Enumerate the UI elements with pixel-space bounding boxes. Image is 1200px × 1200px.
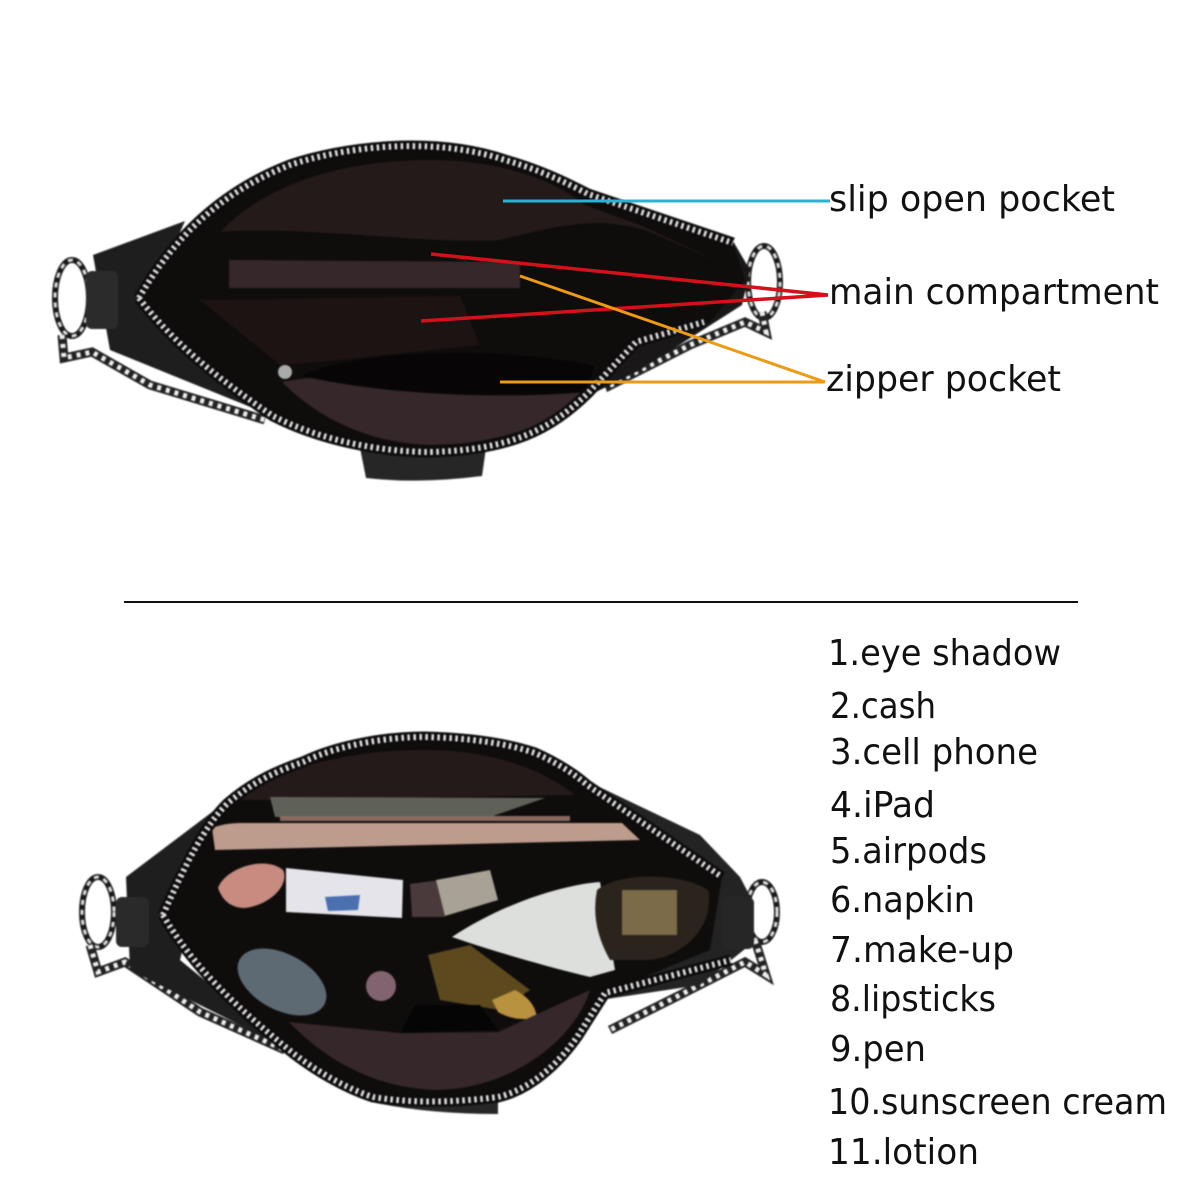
top bag left tab [86, 271, 118, 329]
top bag left ring and chain [55, 260, 265, 420]
item: perfume glass cap [595, 876, 709, 960]
list item 4: 4.iPad [830, 785, 935, 826]
bottom bag back lining [235, 750, 575, 800]
bottom bag zipper edge [163, 737, 731, 1102]
divider [124, 601, 1078, 603]
list item 7: 7.make-up [830, 930, 1014, 971]
item: cash/napkin pack [286, 868, 403, 918]
list item 10: 10.sunscreen cream [828, 1082, 1167, 1123]
top bag body [139, 146, 745, 452]
item: lipstick [366, 971, 396, 1001]
lines: main compartment [421, 254, 828, 321]
napkin logo [325, 895, 360, 911]
list item 1: 1.eye shadow [828, 633, 1061, 674]
list item 2: 2.cash [830, 686, 936, 727]
item list [828, 633, 1167, 1173]
label lines [421, 201, 830, 382]
label: slip open pocket: slip open pocket [829, 179, 1115, 220]
list item 3: 3.cell phone [830, 732, 1038, 773]
bottom bag left ring and chain [82, 877, 285, 1050]
list item 9: 9.pen [830, 1029, 926, 1070]
item: compact round make-up [226, 935, 338, 1029]
top bag outer leather [93, 221, 270, 415]
bottom bag floor lining [289, 990, 590, 1090]
item: napkin grey pouch [270, 797, 545, 817]
line: slip open pocket [503, 200, 830, 202]
item: sunscreen white bottle [452, 882, 615, 977]
top bag zipper pocket opening [302, 353, 595, 395]
line: zipper pocket [500, 276, 825, 382]
bottom bag outer leather [126, 800, 290, 1050]
list item 8: 8.lipsticks [830, 979, 996, 1020]
list item 5: 5.airpods [830, 831, 987, 872]
top bag right ring and chain [605, 246, 780, 388]
item: eye shadow compact [218, 863, 284, 908]
label: main compartment: main compartment [829, 272, 1159, 313]
top bag middle brown area [200, 296, 480, 365]
item: gold lipsticks [428, 945, 530, 1010]
top bag leather tab [360, 448, 486, 481]
item: black phone [400, 1005, 498, 1033]
item: gold lipstick bullet [492, 990, 537, 1019]
item: lotion cap [410, 880, 445, 917]
top bag floor lining [282, 375, 600, 445]
top bag center zip band [229, 260, 520, 288]
item: iPad rose-gold edge [212, 823, 640, 850]
bottom bag: filled handbag [82, 737, 777, 1114]
top bag metal snap [278, 365, 292, 379]
top bag: open handbag interior [55, 146, 780, 481]
bottom bag right ring and chain [610, 882, 777, 1030]
top bag slip pocket lining [220, 160, 720, 262]
bottom bag body [163, 737, 722, 1102]
top bag zipper edge [139, 146, 733, 452]
list item 6: 6.napkin [830, 880, 975, 921]
item: cell phone rose strip [280, 816, 570, 821]
bottom bag tabs [116, 897, 149, 947]
label: zipper pocket: zipper pocket [826, 359, 1061, 400]
bottom bag leather tab [373, 1090, 498, 1114]
list item 11: 11.lotion [828, 1132, 979, 1173]
